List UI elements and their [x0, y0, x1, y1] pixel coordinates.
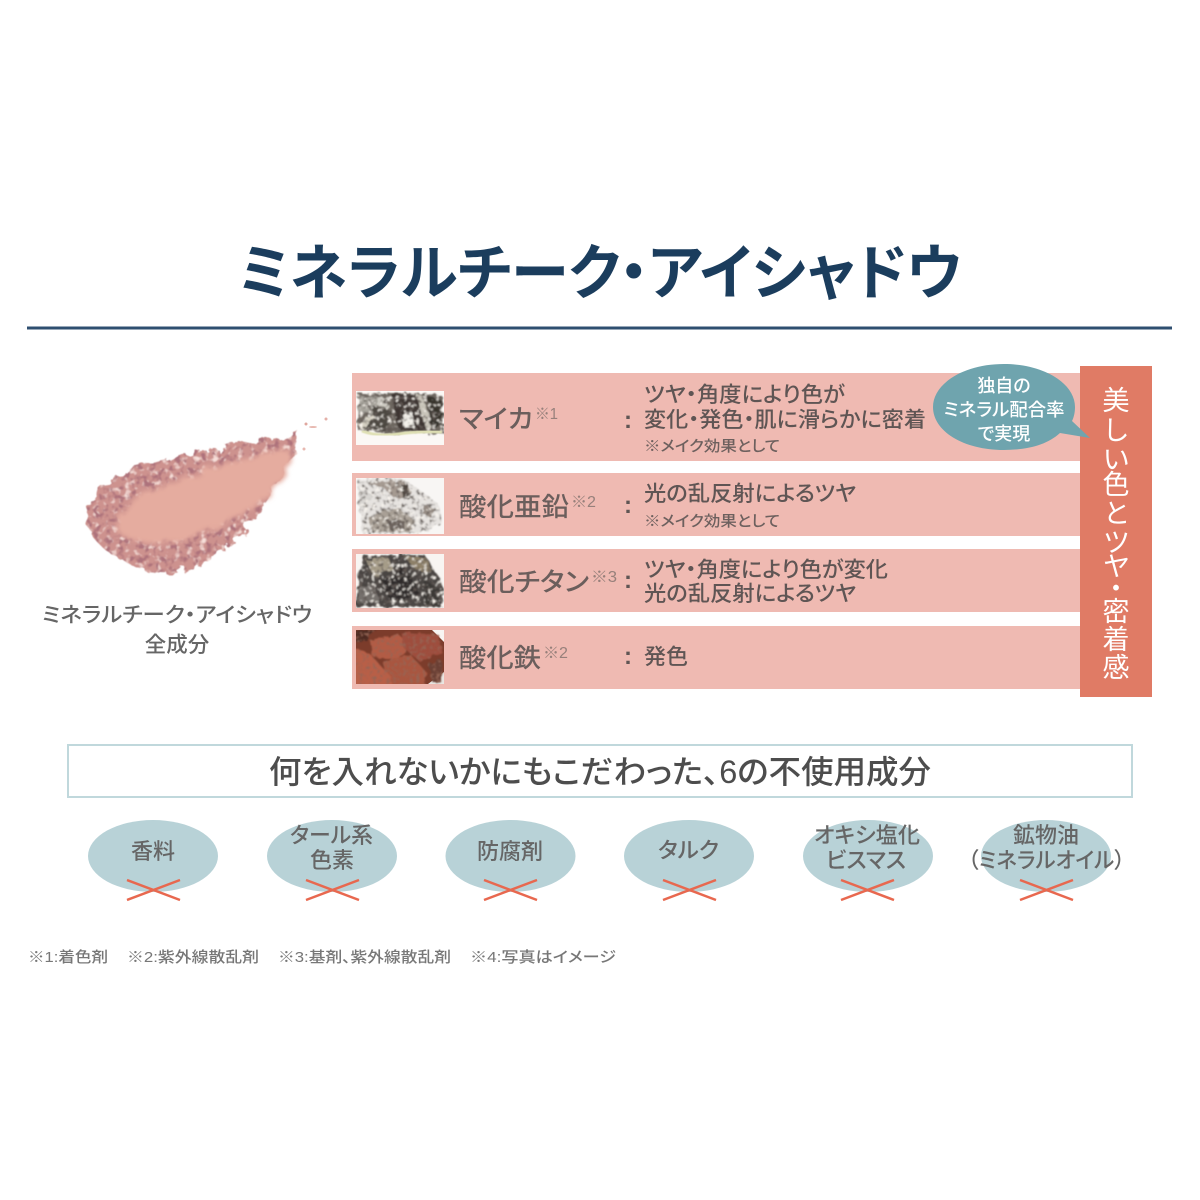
- no-use item: fragrance: 香料: [131, 839, 175, 864]
- titanium oxide effects: [624, 558, 888, 606]
- titanium oxide effects: :: [624, 567, 632, 594]
- callout bubble: [933, 364, 1090, 450]
- iron oxide effects: 発色: [644, 645, 688, 669]
- titanium oxide effects: ツヤ・角度により色が変化: [644, 558, 888, 582]
- side panel: beautiful colour, gloss, adhesion: 美しい色とツヤ・密着感: [1102, 386, 1130, 683]
- zinc oxide effects: ※メイク効果として: [644, 513, 780, 530]
- zinc oxide photo: [356, 478, 444, 534]
- no-use item: mineral oil: [968, 820, 1125, 900]
- no-use item: preservative: [446, 820, 576, 900]
- iron oxide effects: [624, 643, 688, 670]
- no-use item: fragrance: [88, 820, 218, 900]
- zinc oxide effects: :: [624, 492, 632, 519]
- powder swatch: [88, 418, 328, 573]
- footnotes: ※1:着色剤: [28, 948, 108, 966]
- footnotes: ※3:基剤、紫外線散乱剤: [278, 949, 451, 966]
- mica effects: 変化・発色・肌に滑らかに密着: [644, 408, 926, 432]
- no-use item: mineral oil: （ミネラルオイル）: [968, 848, 1125, 873]
- no-use item: tar dye: 色素: [310, 848, 354, 873]
- zinc oxide label: ※2: [571, 494, 596, 511]
- ingredient row: mica: [352, 373, 1080, 461]
- callout bubble: ミネラル配合率: [944, 400, 1064, 420]
- titanium oxide label: ※3: [591, 569, 617, 586]
- titanium oxide photo: [356, 554, 444, 608]
- swatch caption: ミネラルチーク・アイシャドウ: [42, 604, 312, 627]
- mica effects: :: [624, 407, 632, 434]
- no-use item: mineral oil: 鉱物油: [1013, 823, 1079, 848]
- no-use item: tar dye: タール系: [290, 823, 373, 848]
- mica effects: ツヤ・角度により色が: [644, 383, 845, 407]
- swatch caption: 全成分: [145, 633, 210, 657]
- footnotes: ※4:写真はイメージ: [470, 948, 616, 966]
- title: ミネラルチーク・アイシャドウ: [238, 240, 962, 307]
- iron oxide effects: :: [624, 643, 632, 670]
- iron oxide photo: [354, 630, 444, 688]
- mica effects: ※メイク効果として: [644, 438, 780, 455]
- zinc oxide effects: 光の乱反射によるツヤ: [644, 482, 856, 506]
- ingredient row: iron oxide: [352, 626, 1080, 689]
- callout bubble: で実現: [978, 424, 1030, 444]
- footnotes: ※2:紫外線散乱剤: [127, 949, 259, 966]
- titanium oxide label: 酸化チタン: [459, 567, 589, 597]
- titanium oxide effects: 光の乱反射によるツヤ: [644, 582, 856, 606]
- banner heading: [68, 745, 1132, 797]
- no-use item: bismuth oxychloride: [803, 820, 933, 900]
- zinc oxide label: 酸化亜鉛: [459, 492, 569, 522]
- side panel: beautiful colour, gloss, adhesion: [1080, 366, 1152, 697]
- zinc oxide effects: [624, 482, 856, 530]
- no-use item: talc: タルク: [658, 838, 719, 863]
- iron oxide label: 酸化鉄: [459, 643, 541, 673]
- swatch caption: [42, 604, 312, 657]
- ingredient row: zinc oxide: [352, 473, 1080, 536]
- banner heading: 何を入れないかにもこだわった、6の不使用成分: [269, 754, 931, 790]
- no-use item: tar dye: [267, 820, 397, 900]
- mica label: ※1: [535, 406, 558, 423]
- no-use item: preservative: 防腐剤: [477, 839, 543, 864]
- footnotes: [28, 948, 616, 966]
- ingredient row: titanium oxide: [352, 549, 1080, 612]
- callout bubble: 独自の: [977, 376, 1031, 396]
- mica effects: [624, 383, 926, 455]
- no-use item: bismuth oxychloride: ビスマス: [826, 848, 906, 873]
- mica label: マイカ: [459, 404, 533, 434]
- no-use item: bismuth oxychloride: オキシ塩化: [814, 823, 920, 848]
- mica photo: [356, 391, 444, 445]
- iron oxide label: ※2: [543, 645, 568, 662]
- no-use item: talc: [624, 820, 754, 900]
